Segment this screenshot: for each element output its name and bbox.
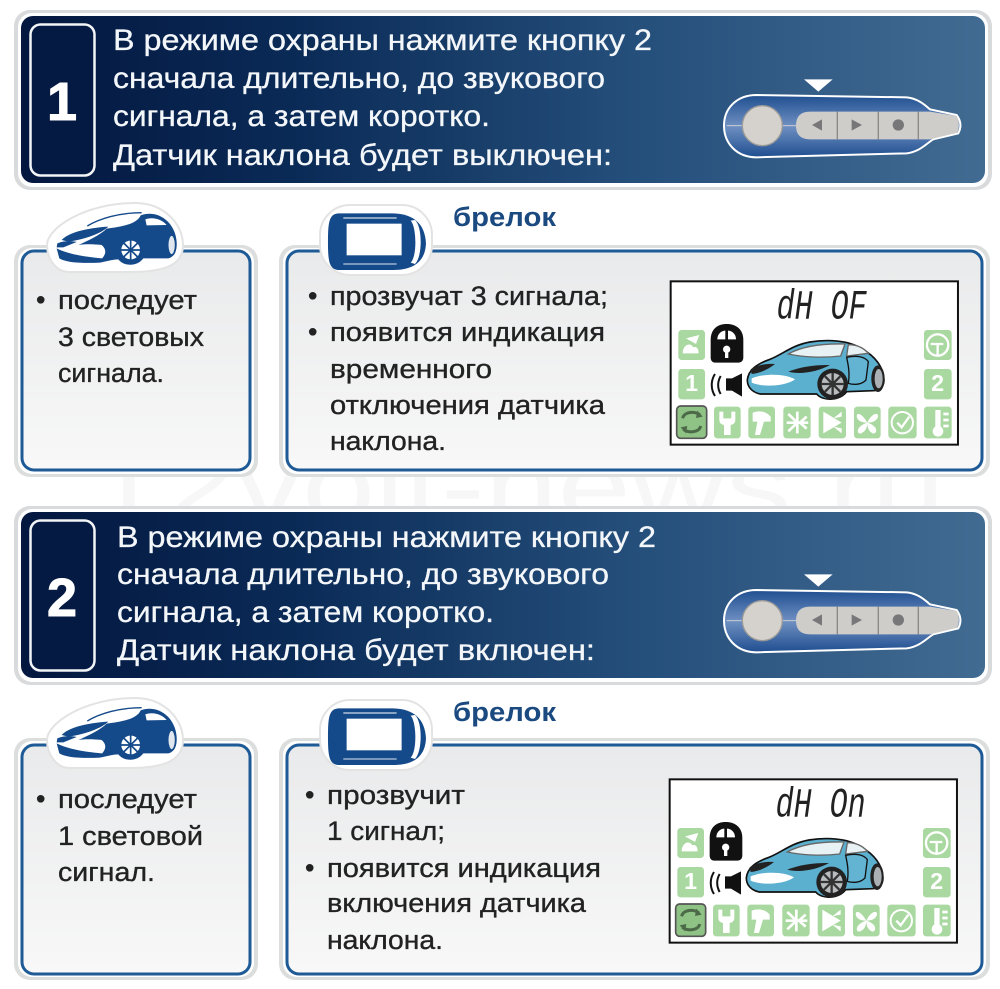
text: remote signals 2: прозвучит <box>327 780 465 810</box>
text: remote signals 1: • <box>308 317 317 347</box>
text: remote signals 2: • <box>305 853 314 883</box>
panel: car result 2 <box>14 698 258 980</box>
instruction text 2: Датчик наклона будет включен: <box>117 634 595 667</box>
text: remote signals 1: • <box>308 281 317 311</box>
step number 2: 2 <box>47 568 77 628</box>
LCD display 1 <box>671 281 958 445</box>
text: remote signals 2: наклона. <box>327 925 443 955</box>
text: remote signals 2: • <box>305 780 314 810</box>
text: car signals 2: последует <box>58 784 197 814</box>
instruction text 2: В режиме охраны нажмите кнопку 2 <box>117 521 656 554</box>
text: car signals 1: 3 световых <box>58 322 205 352</box>
text: car signals 1: сигнала. <box>58 358 164 388</box>
instruction text 1 <box>113 24 652 172</box>
text: remote signals 2: включения датчика <box>327 888 587 918</box>
text: car signals 1: • <box>36 285 45 315</box>
text: car signals 2: сигнал. <box>58 857 155 887</box>
step number 1 <box>30 24 94 176</box>
text: remote signals 1: отключения датчика <box>330 390 606 420</box>
LCD display 1: dH OF <box>777 283 867 331</box>
text: car signals 2 <box>36 784 203 887</box>
instruction text 2: сигнала, а затем коротко. <box>117 596 494 629</box>
step number 1: 1 <box>47 72 77 132</box>
icon: fob 2 <box>320 700 432 770</box>
text: remote signals 2 <box>305 780 601 955</box>
instruction text 1: Датчик наклона будет выключен: <box>113 139 612 172</box>
text: car signals 2: 1 световой <box>58 821 203 851</box>
LCD display 2: dH On <box>776 781 866 829</box>
icon: car 1 <box>47 203 183 272</box>
instruction text 2 <box>117 521 656 667</box>
text: remote signals 1: наклона. <box>330 426 446 456</box>
panel: remote result 2 <box>279 697 990 980</box>
text: car signals 2: • <box>36 784 45 814</box>
panel: car result 1 <box>14 203 258 477</box>
icon: remote key 1 <box>724 79 960 157</box>
panel: remote result 1 <box>279 202 990 477</box>
LCD display 2 <box>670 779 957 943</box>
text: remote signals 1: появится индикация <box>330 317 605 347</box>
text: car signals 1 <box>36 285 205 388</box>
instruction text 1: сначала длительно, до звукового <box>113 62 605 95</box>
instruction text 1: В режиме охраны нажмите кнопку 2 <box>113 24 652 57</box>
heading: fob 2: брелок <box>453 697 557 727</box>
text: remote signals 2: появится индикация <box>327 853 601 883</box>
instruction text 1: сигнала, а затем коротко. <box>113 100 490 133</box>
icon: fob 1 <box>320 205 432 275</box>
heading: fob 1: брелок <box>453 202 557 232</box>
panel: step 1 header <box>14 10 992 190</box>
text: remote signals 2: 1 сигнал; <box>327 816 445 846</box>
text: remote signals 1: прозвучат 3 сигнала; <box>330 281 608 311</box>
text: remote signals 1 <box>308 281 608 456</box>
text: car signals 1: последует <box>58 285 197 315</box>
step number 2 <box>30 520 94 670</box>
icon: car 2 <box>47 698 183 768</box>
icon: remote key 2 <box>724 574 960 652</box>
text: remote signals 1: временного <box>330 354 492 384</box>
instruction text 2: сначала длительно, до звукового <box>117 558 609 591</box>
panel: step 2 header <box>14 506 992 685</box>
watermark: 12volt-news.ru <box>90 429 945 545</box>
